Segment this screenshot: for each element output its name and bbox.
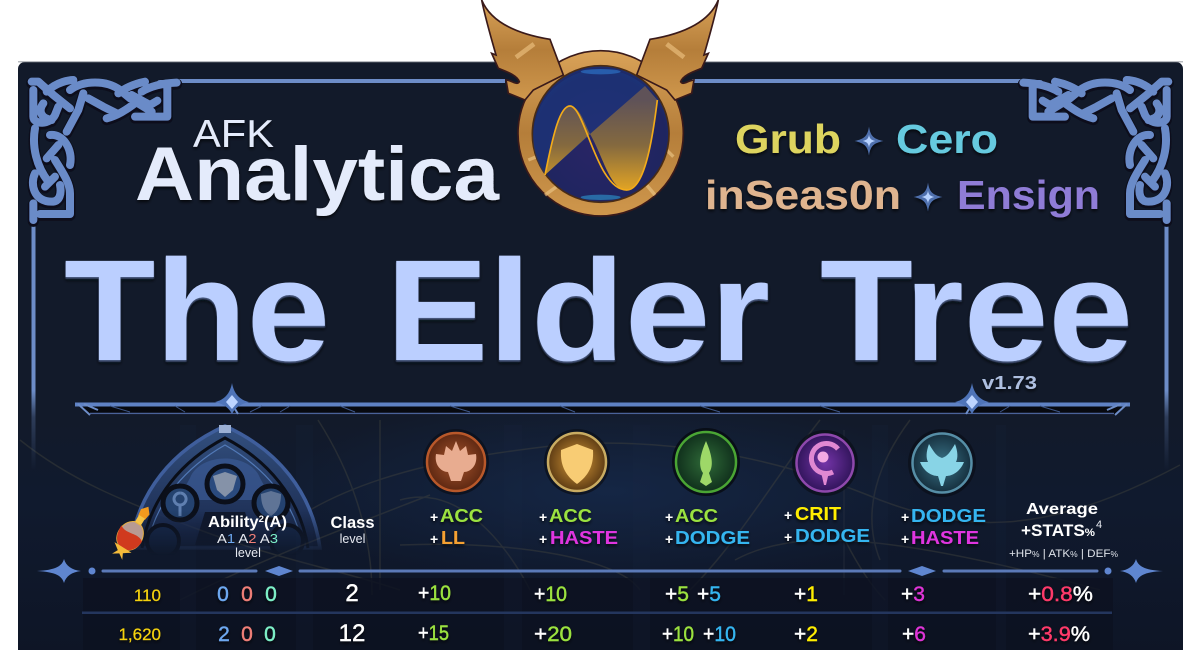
stat: CRIT + DODGE: DODGE	[795, 526, 870, 546]
icon: star separator	[855, 127, 883, 155]
brand: AFK Analytica: Analytica	[135, 132, 500, 217]
stat: ACC + DODGE: DODGE	[675, 528, 750, 548]
stat: ACC + HASTE: +	[539, 509, 547, 525]
stat: ACC + HASTE: +	[539, 531, 547, 547]
wing: left	[482, 0, 563, 100]
header: average stats: Average	[1026, 501, 1098, 518]
table row: level 1: +3	[901, 583, 925, 606]
stat: ACC + DODGE	[665, 506, 750, 548]
header: ability: A1 A2 A3	[217, 532, 278, 546]
stat: ACC + HASTE: ACC	[549, 506, 592, 526]
table row: level 1: 0	[241, 583, 253, 606]
header: class: level	[340, 532, 365, 546]
table row: level 2	[118, 620, 1090, 647]
table row: level 2: +15	[418, 622, 449, 645]
icon: left rule star	[37, 559, 81, 583]
table row: level 2: 12	[339, 620, 365, 647]
title: The	[64, 230, 330, 391]
stat: CRIT + DODGE	[784, 504, 870, 546]
authors: Cero	[896, 116, 998, 162]
icon: star separator 2	[914, 183, 942, 211]
stat: ACC + LL: +	[430, 509, 438, 525]
stat: DODGE + HASTE: HASTE	[911, 528, 979, 548]
icon: right rule star	[1120, 559, 1163, 583]
table row: level 2: +10	[662, 623, 694, 646]
stat: ACC + LL	[430, 506, 483, 548]
table rows background	[82, 425, 1113, 650]
table row: level 2: 0	[241, 623, 253, 646]
table row: level 2: +6	[902, 623, 926, 646]
table row: level 1: +10	[534, 583, 567, 606]
table row: level 1: 0	[217, 583, 229, 606]
title: Elder	[386, 230, 770, 391]
header: average stats	[1009, 501, 1118, 560]
header: ability: (A)	[264, 514, 287, 531]
stat: DODGE + HASTE	[901, 506, 986, 548]
table row: level 2: +3.9%	[1028, 623, 1090, 646]
icon: left divider star	[215, 383, 249, 414]
frame: top lines and fading side lines	[34, 81, 1166, 470]
header: average stats: 4	[1096, 519, 1102, 531]
logo: winged gold ring	[482, 0, 718, 216]
title: Tree	[820, 230, 1133, 391]
title	[64, 230, 1133, 391]
table row: level 1: +5	[665, 583, 689, 606]
stat: ACC + DODGE: +	[665, 531, 673, 547]
icon: blue affinity	[908, 429, 976, 497]
brand: AFK Analytica: AFK	[193, 113, 274, 156]
table row: level 1: 110	[134, 586, 161, 605]
arch medallion: left	[163, 486, 197, 520]
stat: ACC + LL: LL	[441, 528, 465, 548]
icon: green affinity	[672, 428, 740, 496]
table row: level 2: 1,620	[118, 625, 161, 644]
icon: potion	[106, 500, 159, 564]
ring	[518, 51, 683, 216]
disc	[532, 66, 669, 202]
stat: CRIT + DODGE: +	[784, 507, 792, 523]
stat: ACC + HASTE: HASTE	[550, 528, 618, 548]
corner knot: left	[32, 80, 177, 221]
authors: Ensign	[957, 172, 1100, 218]
header: ability: Ability	[208, 514, 255, 531]
stat: ACC + DODGE: ACC	[675, 506, 718, 526]
table row: level 1: +1	[794, 583, 818, 606]
arch medallion: right	[254, 486, 288, 520]
icon: orange affinity	[423, 429, 489, 495]
stat: DODGE + HASTE: +	[901, 509, 909, 525]
header: class	[330, 514, 375, 546]
header: ability: 2	[259, 514, 264, 524]
table row: level 2: 0	[264, 623, 276, 646]
authors: inSeas0n	[705, 172, 901, 218]
stat: ACC + HASTE	[539, 506, 618, 548]
header: average stats: +HP% | ATK% | DEF%	[1009, 548, 1118, 560]
table row: level 1: 0	[265, 583, 277, 606]
icon: purple affinity	[792, 430, 858, 496]
header: class: Class	[330, 514, 375, 532]
stat: ACC + LL: ACC	[440, 506, 483, 526]
header: ability: level	[235, 546, 261, 560]
table row: level 2: +10	[703, 623, 736, 646]
header rule with stars	[37, 559, 1163, 583]
column heads: stat labels	[430, 504, 986, 548]
stat: CRIT + DODGE: CRIT	[795, 504, 841, 524]
wing: right	[637, 0, 718, 100]
stat: ACC + LL: +	[430, 531, 438, 547]
authors	[705, 116, 1100, 218]
icon: right divider star	[955, 383, 989, 414]
table row: level 1: +0.8%	[1028, 583, 1093, 606]
header: ability	[208, 514, 287, 560]
divider: ornate bar	[75, 383, 1130, 415]
table row: level 1: +5	[697, 583, 721, 606]
stat: CRIT + DODGE: +	[784, 529, 792, 545]
background: faint tree branch arcs	[20, 420, 1180, 600]
stat: DODGE + HASTE: +	[901, 531, 909, 547]
table row: level 2: +20	[534, 623, 572, 646]
version: v1.73	[982, 373, 1037, 393]
stat: ACC + DODGE: +	[665, 509, 673, 525]
authors: Grub	[735, 116, 841, 162]
arch medallion: top	[207, 466, 243, 502]
gothic arch window	[130, 425, 320, 557]
header: average stats: +STATS%	[1021, 522, 1095, 540]
table row: level 1: +10	[418, 582, 451, 605]
table row: level 2: +2	[794, 623, 818, 646]
table row: level 2: 2	[218, 623, 230, 646]
icon: gold affinity	[544, 429, 610, 495]
corner knot: right	[1023, 80, 1168, 221]
table row: level 1: 2	[345, 580, 359, 607]
wave mark	[545, 106, 590, 175]
table row: level 1	[134, 580, 1093, 607]
stat: DODGE + HASTE: DODGE	[911, 506, 986, 526]
